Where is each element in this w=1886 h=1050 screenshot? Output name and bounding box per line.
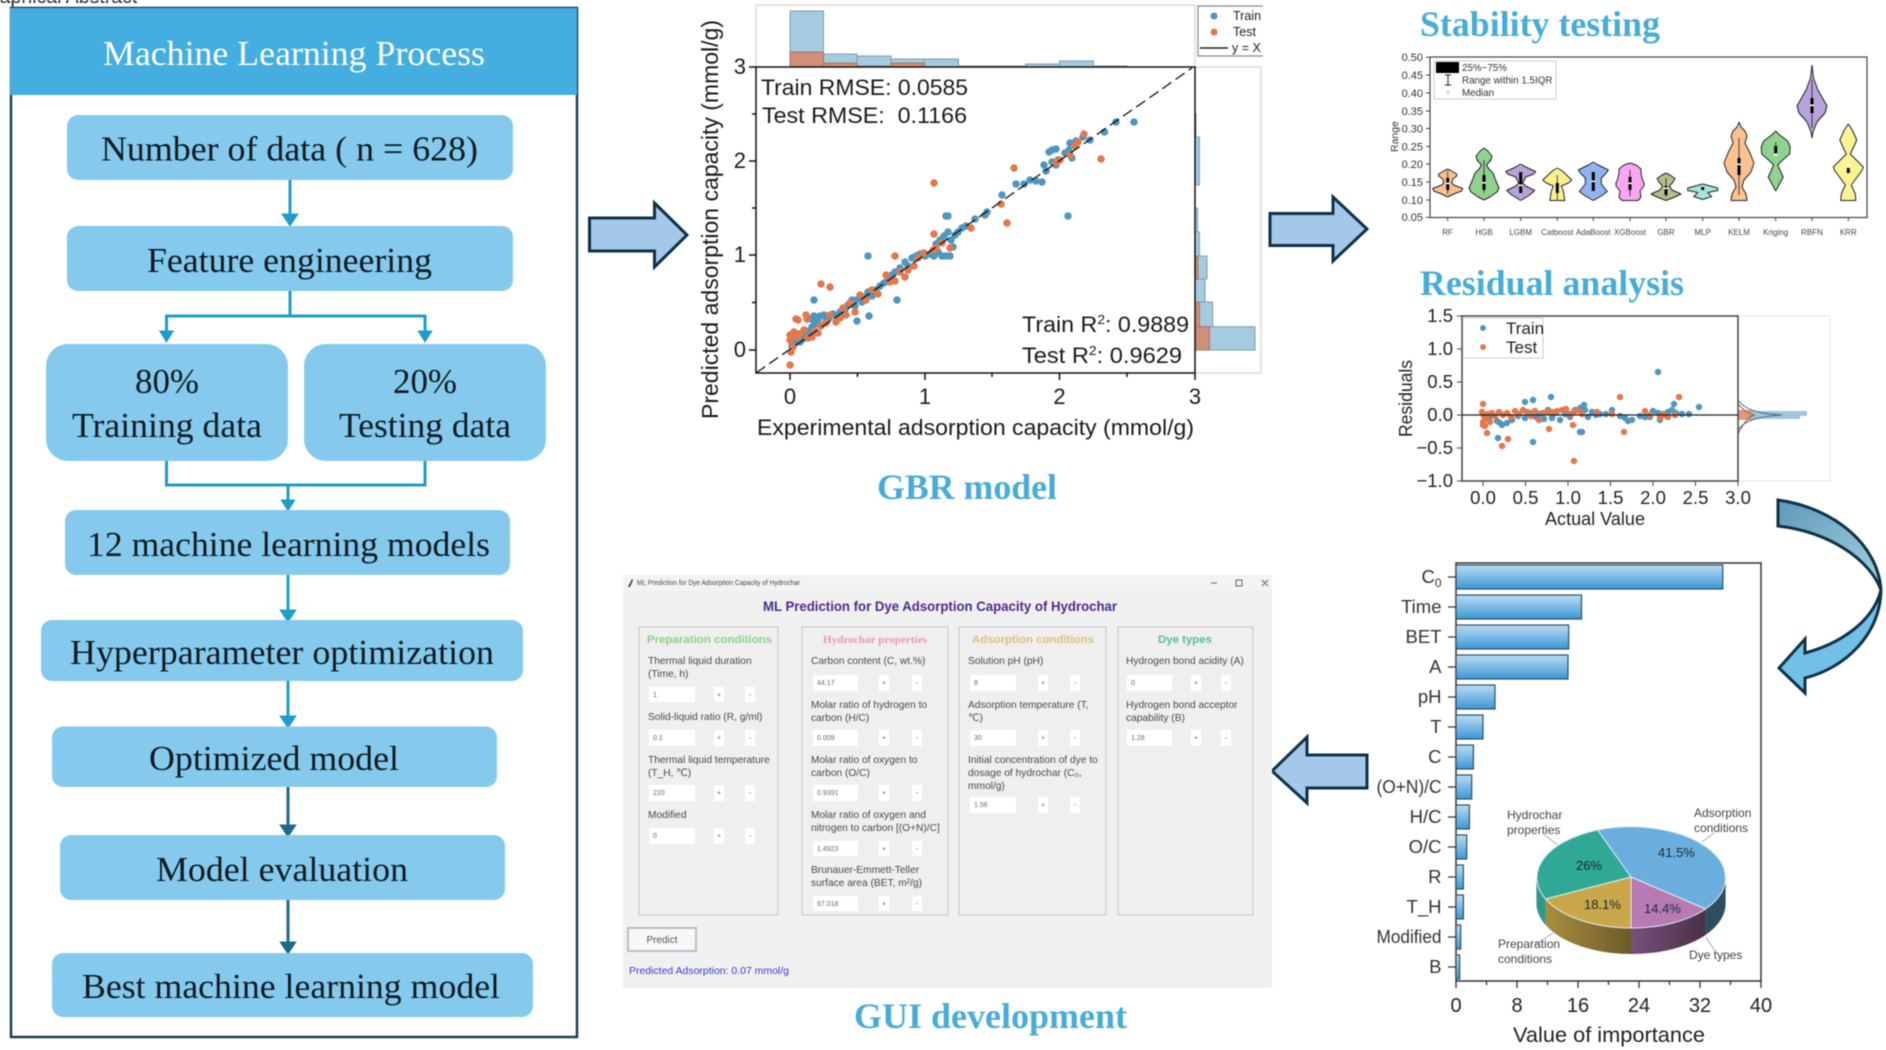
feature labels: C [1421,566,1435,587]
legend: Test [1506,338,1537,357]
step: number of data [67,115,513,180]
pie chart: feature group share: 26% [1576,858,1602,873]
group: hydrochar properties: Carbon content (C, wt.%) [811,656,925,667]
category labels: KRR [1840,228,1857,237]
category labels: XGBoost [1614,228,1647,237]
group: hydrochar properties: + [882,846,886,853]
axis numbers: 1.5 [1598,487,1623,508]
group: hydrochar properties: carbon (O/C) [811,768,870,779]
axis numbers: 3 [1189,384,1201,409]
group: hydrochar properties: carbon (H/C) [811,713,869,724]
pie chart: feature group share: Adsorption [1694,806,1751,820]
step: number of data: Number of data ( n = 628) [101,130,478,168]
metrics: R squared: Train R [1022,312,1093,337]
group: preparation conditions: + [717,833,721,840]
step: training data [46,344,288,461]
pie chart: feature group share: conditions [1694,821,1748,835]
step: testing data [304,344,546,461]
y = x reference line [756,68,1192,373]
violin: KRR [1833,124,1863,200]
feature labels: O/C [1409,836,1442,857]
axis numbers: −0.5 [1416,437,1453,458]
arrow: split into training and testing [162,291,430,340]
panel header [10,8,577,95]
group: adsorption conditions: + [1041,680,1045,687]
violin: HGB [1469,148,1499,200]
axis numbers: 8 [1511,995,1523,1017]
group: dye types: Dye types [1158,634,1212,646]
pie chart: feature group share: Hydrochar [1507,808,1562,822]
group: preparation conditions: + [717,692,721,699]
group: preparation conditions: - [749,790,752,797]
group: adsorption conditions: 8 [974,680,978,687]
category labels: Kriging [1763,228,1788,237]
group: preparation conditions: Preparation conditions [647,634,772,646]
step: hyperparameter optimization [41,620,523,681]
group: adsorption conditions: - [1074,680,1077,687]
legend: Median [1462,88,1494,99]
group: adsorption conditions: - [1074,802,1077,809]
chart: GBR parity scatter plot [697,5,1263,440]
step: optimized model: Optimized model [149,739,399,778]
pie chart: feature group share: properties [1507,823,1560,837]
group: hydrochar properties [802,627,948,915]
axis numbers: 0.0 [1470,487,1496,508]
arrow: data to feature engineering [284,180,296,224]
pie chart: feature group share: conditions [1498,952,1552,966]
group: adsorption conditions: Adsorption temperature (T, [968,700,1089,711]
arrow: importance to GUI [1272,737,1367,803]
legend: Test [1233,25,1256,39]
train residuals [1490,372,1699,442]
axis numbers: 0 [784,384,796,409]
axis numbers: 1 [919,384,931,409]
y axis: 0.45 [1402,70,1423,82]
y axis: 0.50 [1402,52,1423,64]
arrow: curved arrow residuals to importance [1778,500,1881,693]
test points [790,134,1101,365]
group: hydrochar properties: 1.4923 [817,846,839,853]
prediction result: Predicted Adsorption: 0.07 mmol/g [629,965,789,977]
step: model evaluation: Model evaluation [156,850,408,889]
group: dye types: capability (B) [1126,713,1185,724]
group: hydrochar properties: + [882,901,886,908]
top marginal histogram [756,5,1261,373]
legend [1463,318,1544,358]
feature labels [1376,566,1442,977]
axis numbers: 32 [1689,995,1711,1017]
axis numbers: 0 [734,337,746,362]
step: optimized model [52,726,497,787]
feature labels: (O+N)/C [1376,776,1442,797]
group: hydrochar properties: Brunauer-Emmett-Teller [811,865,920,876]
group: preparation conditions: 0 [653,833,657,840]
violin: XGBoost [1616,163,1644,200]
category labels: KELM [1728,228,1750,237]
x axis title: Actual Value [1545,508,1645,529]
feature labels: T [1430,716,1442,737]
group: hydrochar properties: nitrogen to carbon [(O+N)/C] [811,823,940,834]
metrics: R squared: : 0.9889 [1105,312,1189,337]
arrow: process to GBR model [590,203,687,267]
group: dye types: + [1194,680,1198,687]
axis numbers: 1.5 [1427,305,1453,326]
test residuals [1482,397,1679,461]
panel: machine learning process flowchart [10,8,577,1037]
axis numbers: 0 [1450,995,1462,1017]
window title bar [623,575,1272,591]
group: dye types: + [1194,735,1198,742]
pie chart: feature group share: Dye types [1689,948,1742,962]
legend: Range within 1.5IQR [1462,76,1552,86]
train points [792,122,1134,346]
group: adsorption conditions: + [1041,735,1045,742]
group: adsorption conditions: ℃) [968,713,983,724]
group: adsorption conditions: dosage of hydrochar (C₀, [968,768,1082,779]
feature labels: C [1428,746,1442,767]
residual histogram [1738,400,1807,434]
axis numbers: 16 [1567,995,1589,1017]
y axis: 0.10 [1402,195,1423,207]
feature labels: BET [1406,626,1442,647]
GUI heading: ML Prediction for Dye Adsorption Capacity of Hydrochar [763,598,1118,614]
category labels: HGB [1475,228,1493,237]
heading: stability testing: Stability testing [1420,4,1660,44]
chart: stability violin plot [1389,52,1867,237]
legend [1198,6,1263,56]
violin: Catboost [1543,168,1572,200]
group: hydrochar properties: Molar ratio of oxygen to [811,755,918,766]
predict button: Predict [646,935,678,946]
group: dye types: Hydrogen bond acceptor [1126,700,1238,711]
group: hydrochar properties: + [882,790,886,797]
category labels: RF [1442,228,1453,237]
violin: KELM [1724,122,1754,200]
group: preparation conditions: Modified [648,810,687,821]
axis numbers: 2.5 [1683,487,1708,508]
feature labels: R [1428,866,1442,887]
group: hydrochar properties: 44.17 [817,680,835,687]
group: adsorption conditions: Solution pH (pH) [968,656,1043,667]
violin: MLP [1688,184,1718,200]
arrow: optimized model to evaluation [282,787,294,835]
group: hydrochar properties: - [916,680,919,687]
heading: GUI development: GUI development [854,996,1127,1036]
group: preparation conditions: - [749,833,752,840]
category labels: MLP [1694,228,1711,237]
group: hydrochar properties: Molar ratio of oxygen and [811,810,926,821]
group: hydrochar properties: + [882,680,886,687]
group: hydrochar properties: surface area (BET, m²/g) [811,878,922,889]
metrics: R squared: 2 [1089,343,1097,358]
feature labels: H/C [1410,806,1442,827]
x axis title: Experimental adsorption capacity (mmol/g) [757,415,1194,440]
axis numbers: 40 [1750,995,1772,1017]
feature labels: Modified [1376,926,1442,947]
axis numbers: 24 [1628,995,1650,1017]
violin: Kriging [1761,131,1790,191]
group: hydrochar properties: - [916,846,919,853]
category labels: AdaBoost [1576,228,1611,237]
legend: y = X [1232,41,1261,55]
zero line [1462,414,1738,416]
violin: AdaBoost [1578,162,1608,200]
arrow: GBR model to stability testing [1270,197,1367,261]
category labels: RBFN [1801,228,1823,237]
group: hydrochar properties: Molar ratio of hydrogen to [811,700,927,711]
metrics: RMSE: Test RMSE: 0.1166 [762,103,967,128]
step: testing data: 20% [393,362,457,401]
feature labels: pH [1418,686,1442,707]
y axis: 0.15 [1402,177,1423,189]
group: adsorption conditions [959,627,1106,915]
pie chart: feature group share: 18.1% [1584,897,1621,912]
feature labels: A [1429,656,1442,677]
step: training data: 80% [135,362,199,401]
group: hydrochar properties: - [916,901,919,908]
group: preparation conditions: (T_H, ℃) [648,768,691,779]
pie chart: feature group share: 14.4% [1644,901,1681,916]
group: hydrochar properties: + [882,735,886,742]
step: best machine learning model: Best machine learning model [82,967,500,1006]
group: dye types: - [1225,680,1228,687]
step: best machine learning model [52,953,533,1017]
group: preparation conditions [639,627,778,915]
ticks [1457,316,1738,486]
legend: Train [1233,9,1261,23]
step: 12 machine learning models [65,510,510,575]
chart: residual scatter plot [1395,305,1830,529]
axis numbers: 2 [1053,384,1066,409]
step: feature engineering: Feature engineering [147,241,432,280]
step: model evaluation [60,835,505,900]
heading: residual analysis: Residual analysis [1420,263,1684,303]
arrow: optimization to optimized model [282,681,294,726]
axis numbers: 2 [734,148,746,173]
violin: RBFN [1797,65,1827,138]
step: 12 machine learning models: 12 machine learning models [87,525,490,564]
legend: 25%~75% [1462,63,1507,74]
category labels: LGBM [1509,228,1532,237]
group: preparation conditions: Solid-liquid ratio (R, g/ml) [648,712,762,723]
group: preparation conditions: Thermal liquid duration [648,656,752,667]
group: preparation conditions: - [749,735,752,742]
category labels: GBR [1657,228,1675,237]
group: preparation conditions: 1 [653,692,657,699]
group: preparation conditions: Thermal liquid temperature [648,755,770,766]
panel: GUI window [623,575,1272,988]
metrics: RMSE: Train RMSE: 0.0585 [761,75,968,100]
step: feature engineering [67,226,513,291]
heading: GBR model: GBR model [877,467,1057,507]
arrow: evaluation to best model [282,900,294,952]
y axis title: Residuals [1395,360,1416,437]
axis numbers: 3.0 [1725,487,1751,508]
group: hydrochar properties: 0.9391 [817,790,839,797]
pie chart: feature group share: 41.5% [1658,845,1695,860]
right marginal histogram [1195,114,1255,350]
legend [1434,61,1556,99]
group: hydrochar properties: 97.018 [817,901,839,908]
group: adsorption conditions: - [1074,735,1077,742]
arrow: merge into models [166,461,425,509]
y axis: 0.20 [1402,159,1423,171]
y axis: 0.35 [1402,106,1423,118]
group: adsorption conditions: + [1041,802,1045,809]
axis numbers: 0.0 [1427,404,1453,425]
y axis: 0.05 [1402,212,1423,224]
chart: feature importance bars [1376,563,1772,1047]
feature labels: T_H [1407,896,1442,918]
panel header: Machine Learning Process [103,34,485,73]
window title bar: ML Prediction for Dye Adsorption Capacity of Hydrochar [637,580,801,587]
group: dye types: 0 [1131,680,1135,687]
group: adsorption conditions: Adsorption conditions [972,634,1094,646]
metrics: R squared [1022,312,1189,368]
violin: RF [1433,169,1463,197]
group: adsorption conditions: mmol/g) [968,781,1005,792]
legend: Train [1506,319,1544,338]
group: hydrochar properties: - [916,790,919,797]
y axis: 0.30 [1402,124,1423,136]
violin: GBR [1651,173,1681,200]
group: preparation conditions: (Time, h) [648,669,688,680]
y axis: 0.25 [1402,142,1423,154]
group: preparation conditions: 0.1 [653,735,663,742]
step: hyperparameter optimization: Hyperparameter optimization [70,633,494,672]
axis numbers: 3 [734,54,746,79]
y axis: 0.40 [1402,88,1423,100]
bars [1456,565,1723,979]
feature labels: B [1429,956,1442,977]
x axis title: Value of importance [1513,1024,1705,1047]
group: dye types: 1.28 [1131,735,1145,742]
violin: LGBM [1506,164,1536,200]
metrics: R squared: Test R [1022,343,1084,368]
group: hydrochar properties: - [916,735,919,742]
axis numbers: 1.0 [1555,487,1581,508]
step: testing data: Testing data [339,406,511,445]
feature labels: 0 [1435,576,1442,590]
group: dye types: Hydrogen bond acidity (A) [1126,656,1244,667]
pie chart: feature group share: Preparation [1498,937,1560,951]
group: hydrochar properties: Hydrochar properties [823,634,928,646]
axis numbers: 0.5 [1427,371,1453,392]
y axis: Range [1389,121,1401,152]
category labels: Catboost [1541,228,1574,237]
group: dye types [1118,627,1253,915]
group: hydrochar properties: 0.009 [817,735,835,742]
group: adsorption conditions: 1.56 [974,802,988,809]
axis numbers [1416,305,1751,508]
predict button [628,928,696,951]
metrics: R squared: : 0.9629 [1097,343,1182,368]
pie chart: feature group share [1498,806,1751,966]
metrics: R squared: 2 [1097,312,1105,327]
x and y axis ticks [749,67,1195,380]
y axis [1389,52,1430,224]
metrics: RMSE [761,75,968,128]
ticks [1448,577,1761,988]
axis numbers: −1.0 [1416,470,1453,491]
y axis title: Predicted adsorption capacity (mmol/g) [697,20,723,419]
axis numbers: 1.0 [1427,338,1453,359]
step: training data: Training data [72,406,262,445]
axis numbers: 2.0 [1640,487,1666,508]
group: preparation conditions: - [749,692,752,699]
axis numbers [734,54,1201,409]
group: adsorption conditions: 30 [974,735,982,742]
axis numbers: 1 [734,242,746,267]
axis numbers [1450,995,1772,1017]
group: adsorption conditions: Initial concentration of dye to [968,755,1098,766]
feature labels: Time [1401,596,1442,617]
group: preparation conditions: 220 [653,790,665,797]
group: preparation conditions: + [717,790,721,797]
category labels [1442,217,1857,237]
axis numbers: 0.5 [1513,487,1538,508]
group: preparation conditions: + [717,735,721,742]
arrow: models to optimization [282,575,294,620]
group: dye types: - [1225,735,1228,742]
